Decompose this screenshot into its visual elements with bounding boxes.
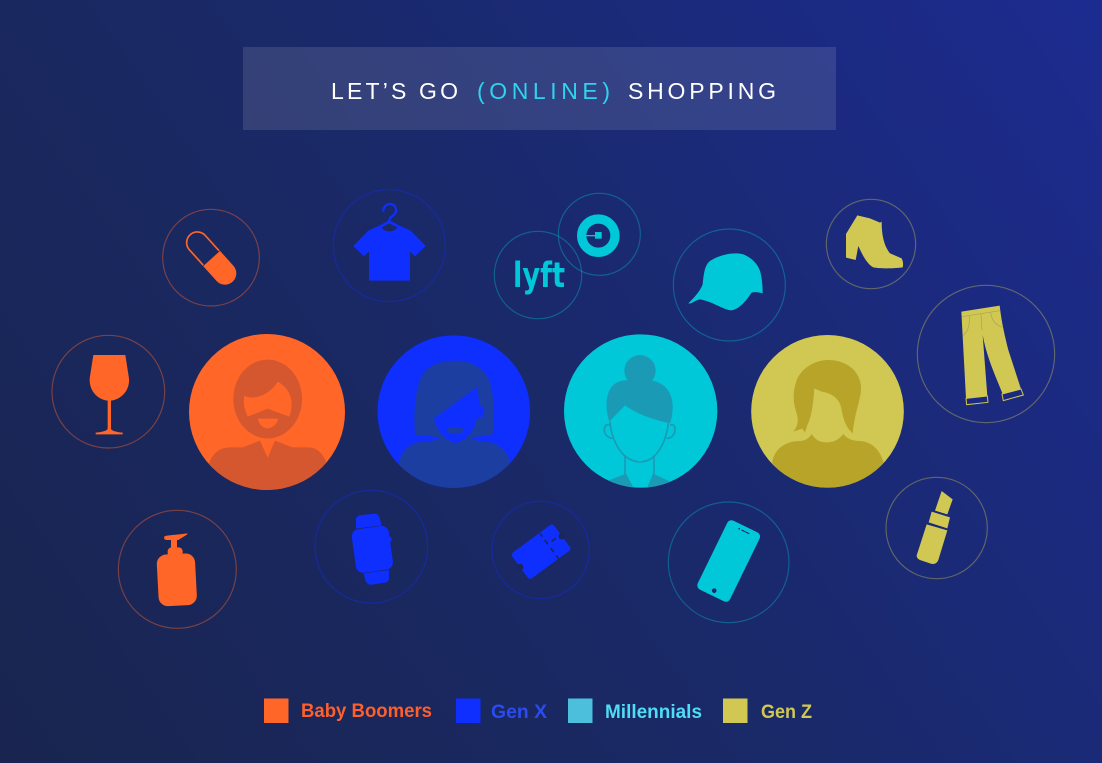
icon: lyft logo: lyft (513, 256, 565, 296)
icon: jeans (917, 285, 1055, 423)
icon: pill (163, 209, 259, 306)
icon: lyft logo (494, 231, 582, 319)
title text: (ONLINE) (477, 78, 610, 104)
icon: t-shirt on hanger (333, 190, 445, 302)
icon: lipstick (886, 477, 987, 579)
legend: baby boomers: Baby Boomers (301, 701, 432, 722)
legend: gen x: Gen X (491, 702, 547, 723)
title text (331, 78, 776, 104)
legend: millennials: Millennials (605, 702, 702, 723)
icon: wine glass (52, 335, 165, 448)
title text: LET’S GO (331, 78, 458, 104)
title text: SHOPPING (628, 78, 776, 104)
persona: baby boomer (189, 334, 345, 497)
icon: soap bottle (118, 510, 236, 628)
legend: gen z: Gen Z (761, 702, 812, 723)
title banner (243, 47, 836, 130)
icon: uber logo (558, 193, 640, 275)
icon: ankle boot (826, 199, 916, 289)
legend: gen z (723, 698, 812, 723)
legend: baby boomers (264, 698, 432, 723)
icon: baseball cap (673, 229, 785, 341)
icon: ticket (492, 501, 589, 599)
icon: smartphone (668, 502, 789, 623)
legend: millennials (568, 698, 702, 723)
persona: millennial (564, 334, 717, 489)
persona: gen z (751, 335, 904, 497)
legend: gen x (456, 698, 547, 723)
legend (264, 698, 812, 723)
icon: smartwatch (315, 490, 428, 603)
persona: gen x (377, 335, 530, 497)
